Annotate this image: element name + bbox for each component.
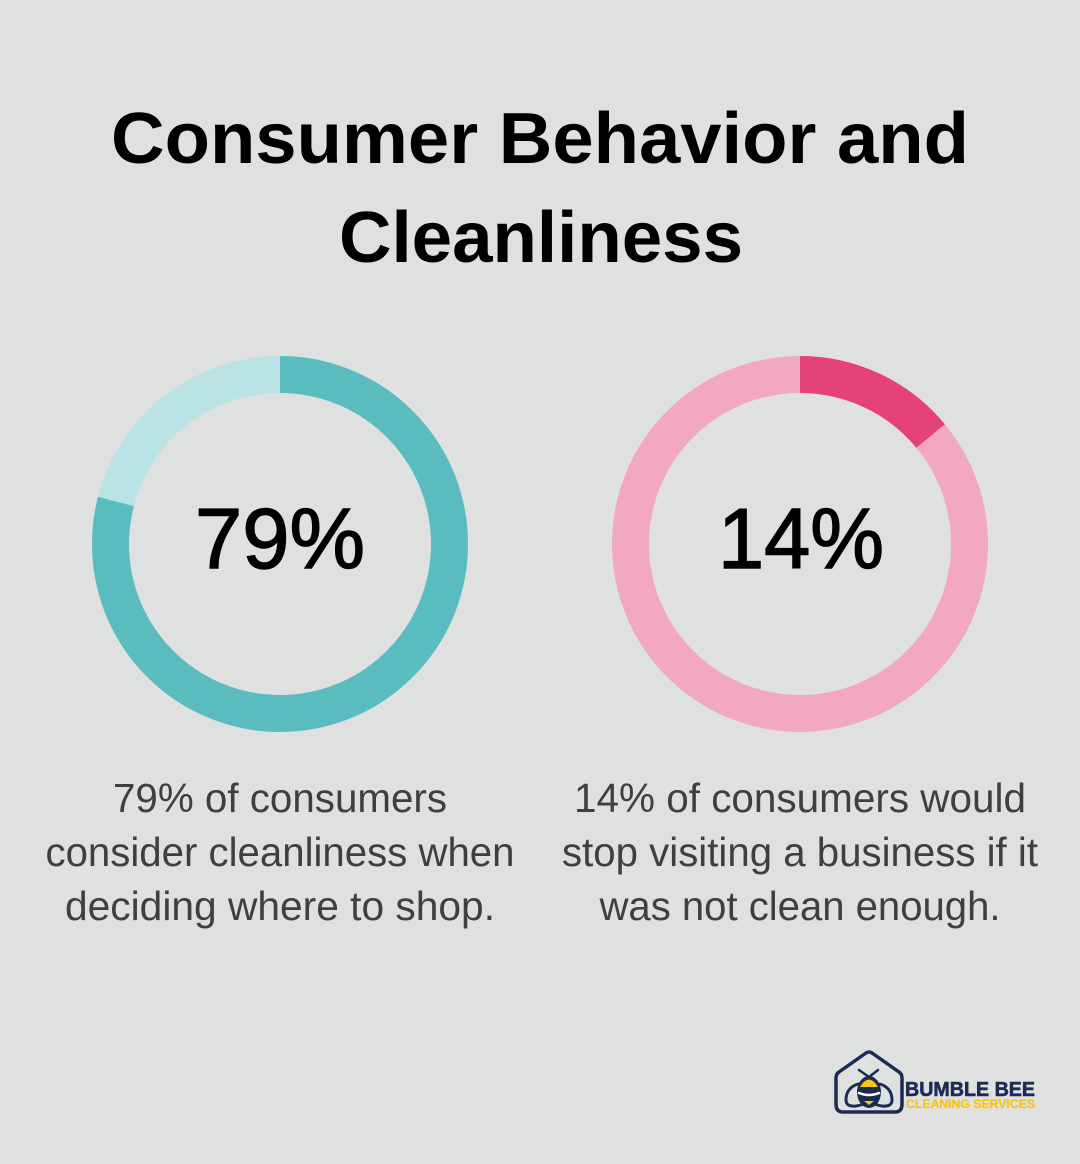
description: 14%: was not clean enough. [599,883,1000,929]
title: Cleanliness [339,198,743,278]
icon: house with bee [836,1052,902,1112]
description: 14%: stop visiting a business if it [562,829,1039,875]
value: 79%: 79% [195,492,365,587]
description: 79%: 79% of consumers [113,775,447,821]
logo: Bumble Bee Cleaning Services [836,1052,1035,1112]
donut chart: 14% [630,374,970,714]
logo wordmark: BUMBLE BEE [905,1079,1035,1101]
value: 14%: 14% [718,492,884,587]
donut chart: 79% [110,374,450,714]
description: 14% [562,775,1039,929]
panel: 14% statistic [562,374,1039,929]
description: 79% [46,775,514,929]
panel: 79% statistic [46,374,514,929]
description: 79%: deciding where to shop. [65,883,495,929]
description: 79%: consider cleanliness when [46,829,514,875]
title: Consumer Behavior and [111,99,969,179]
logo tagline: CLEANING SERVICES [906,1097,1035,1111]
description: 14%: 14% of consumers would [574,775,1026,821]
title [111,99,969,278]
